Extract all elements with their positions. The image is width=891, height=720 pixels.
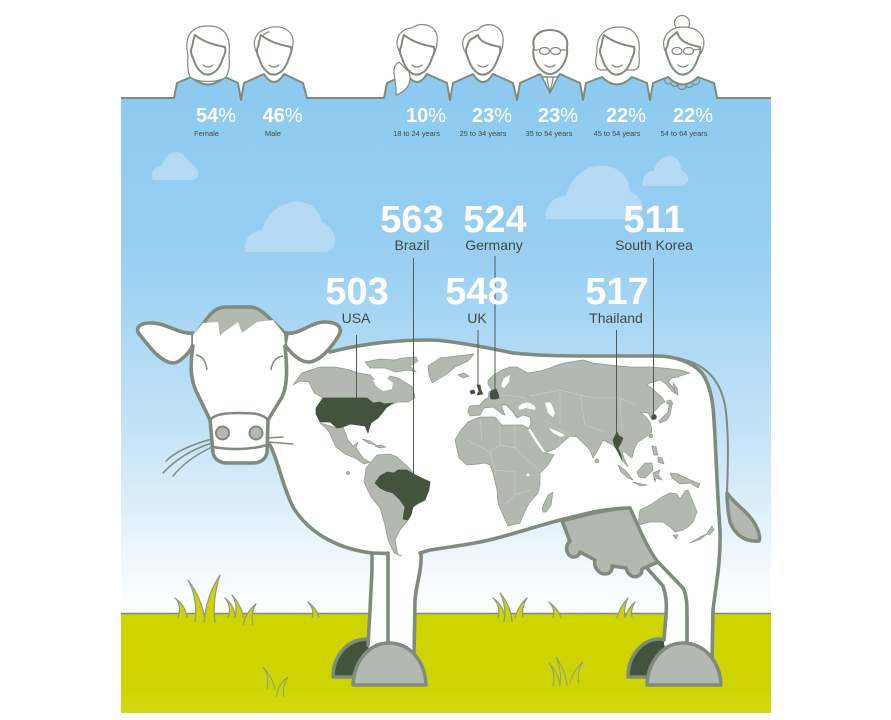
map: south korea [652, 415, 656, 419]
person: male [254, 27, 293, 75]
map: taiwan [649, 434, 653, 438]
face [191, 320, 287, 463]
person: young woman with ponytail [394, 24, 437, 95]
demographic stats: 22% [606, 105, 646, 127]
country labels: South Korea [615, 237, 693, 253]
map: africa borders [467, 418, 540, 505]
map: greenland [428, 354, 474, 383]
map: myanmar [613, 432, 623, 460]
person: 25 to 34 [463, 25, 503, 75]
inner ear curves [196, 355, 207, 370]
country labels: Brazil [394, 237, 430, 253]
demographic stats: 54% [196, 105, 236, 127]
map: indonesia and philippines [618, 446, 700, 488]
demographic stats: 23% [472, 105, 512, 127]
country labels: USA [342, 310, 371, 326]
country labels: 511 [623, 199, 685, 241]
demographic stats: 23% [538, 105, 578, 127]
person: 55 to 64 woman with bun and glasses [664, 16, 704, 90]
ground [121, 614, 771, 713]
country labels: 524 [463, 199, 527, 241]
map: iceland [458, 373, 469, 378]
demographic stats: 22% [673, 105, 713, 127]
cow rear hoof dark [628, 639, 690, 677]
map: mexico and central america [320, 423, 370, 464]
demographic stats [194, 105, 713, 138]
cow body [268, 340, 720, 665]
nostrils [216, 426, 229, 440]
map: asia borders [505, 390, 635, 436]
demographic stats: 35 to 54 years [526, 129, 573, 138]
muzzle lines [210, 413, 268, 420]
left ear [138, 323, 193, 363]
person: 35 to 44 man with glasses and tie [533, 30, 567, 93]
cow front hoof dark [333, 639, 396, 677]
demographic stats: Male [265, 129, 281, 138]
sky background with shoulder silhouettes [121, 74, 771, 614]
map: new zealand [690, 526, 714, 543]
demographic stats: 54 to 64 years [661, 129, 708, 138]
grass tufts [175, 575, 635, 697]
poll tuft [195, 307, 287, 335]
map: arctic islands [365, 357, 418, 372]
cow head [138, 307, 340, 476]
map: inland seas [501, 375, 565, 437]
map: galapagos [346, 472, 350, 474]
map: uk and ireland [470, 385, 483, 395]
demographic stats: 10% [406, 105, 446, 127]
map: germany [490, 389, 499, 399]
country labels: 563 [380, 199, 444, 241]
person: female [187, 26, 229, 82]
cow tail [675, 358, 760, 541]
map: sri lanka [595, 459, 599, 463]
cow front hoof light [353, 643, 426, 685]
map: lake victoria [526, 473, 530, 477]
country labels: UK [467, 310, 487, 326]
country labels [325, 199, 693, 326]
demographic stats: 25 to 34 years [460, 129, 507, 138]
map: north america [293, 367, 415, 404]
map: australia [638, 490, 697, 532]
map: red sea [529, 429, 544, 452]
person: 45 to 54 woman with bob [596, 27, 639, 75]
country labels: 548 [445, 271, 509, 313]
map: south america [364, 454, 430, 556]
country labels: Germany [465, 237, 523, 253]
demographic stats: Female [194, 129, 219, 138]
whiskers [163, 437, 293, 476]
map: usa [316, 398, 393, 433]
right ear [285, 322, 340, 362]
map: caribbean [362, 439, 386, 448]
map: africa [455, 417, 554, 526]
cow rear hoof light [647, 643, 721, 685]
demographic stats: 45 to 54 years [594, 129, 641, 138]
world map [293, 354, 714, 556]
cow udder [562, 508, 658, 577]
map: eurasia [468, 360, 690, 467]
clouds [152, 152, 688, 252]
map: japan [659, 400, 673, 423]
map: tasmania [673, 535, 678, 539]
demographic stats: 46% [262, 105, 303, 127]
callout lines [356, 256, 654, 476]
demographic stats: 18 to 24 years [393, 129, 440, 138]
map: madagascar [542, 492, 553, 512]
country labels: Thailand [589, 310, 643, 326]
map: brazil [375, 470, 430, 520]
map: hudson bay [373, 377, 393, 391]
country labels: 503 [325, 271, 389, 313]
map: sakhalin [673, 383, 678, 395]
country labels: 517 [585, 271, 649, 313]
